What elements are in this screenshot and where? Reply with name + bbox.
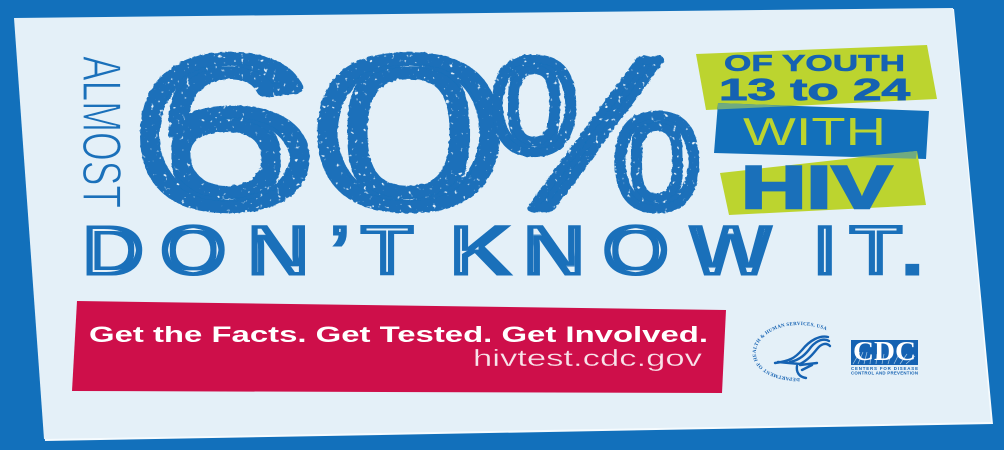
digit 0: 0 xyxy=(314,15,503,250)
digit 6: 6 xyxy=(133,16,314,250)
text: OF YOUTH: OF YOUTH xyxy=(724,50,905,76)
eagle icon xyxy=(775,337,830,378)
digit 0: 0 xyxy=(314,15,503,250)
percent sign: % xyxy=(488,13,703,254)
text: 13 to 24: 13 to 24 xyxy=(719,72,911,107)
banner: call to action xyxy=(72,301,726,393)
headline: DON'T KNOW IT.: IT. xyxy=(812,211,925,291)
text: HIV: HIV xyxy=(741,154,892,221)
headline: DON'T KNOW IT. xyxy=(81,211,925,291)
digit 6: 6 xyxy=(133,16,314,250)
blue strip: with xyxy=(714,103,929,159)
headline: DON'T KNOW IT.: DON’T xyxy=(81,211,414,291)
headline: DON'T KNOW IT.: DON’T xyxy=(81,211,414,291)
lime strip: HIV xyxy=(720,151,926,221)
big number: 60% xyxy=(133,13,703,254)
CDC tagline 1: CENTERS FOR DISEASE xyxy=(851,366,918,371)
label: ALMOST: ALMOST xyxy=(71,56,133,208)
headline: DON'T KNOW IT.: KNOW xyxy=(449,211,773,291)
headline: DON'T KNOW IT.: KNOW xyxy=(449,211,773,291)
callout: of youth 13 to 24 with HIV xyxy=(696,45,937,221)
seal lettering: DEPARTMENT OF HEALTH & HUMAN SERVICES, USA xyxy=(752,322,826,382)
logo: HHS seal xyxy=(752,322,832,382)
CDC tagline 2: CONTROL AND PREVENTION xyxy=(851,370,918,376)
banner headline: Get the Facts. Get Tested. Get Involved. xyxy=(89,322,708,347)
text: WITH: WITH xyxy=(743,111,886,154)
lime strip: of youth xyxy=(696,45,937,110)
CDC letters: CDC xyxy=(853,336,916,366)
percent sign: % xyxy=(488,13,703,254)
banner url: hivtest.cdc.gov xyxy=(473,345,703,371)
logo: CDC xyxy=(851,336,918,376)
headline: DON'T KNOW IT.: IT xyxy=(812,211,903,291)
CDC rays xyxy=(853,352,915,364)
CDC box xyxy=(851,340,918,365)
